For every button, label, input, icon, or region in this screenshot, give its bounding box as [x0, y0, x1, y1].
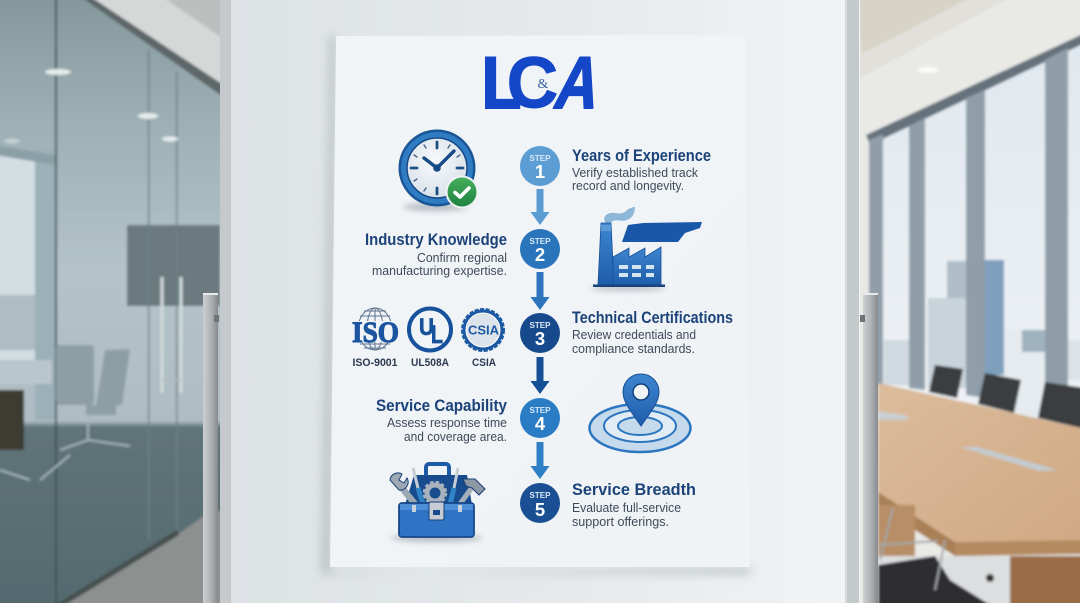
logo: LC&A: C	[507, 43, 558, 124]
step 5 badge: STEP	[530, 490, 551, 500]
arrow: step 3 to 4	[530, 357, 550, 394]
text: Industry Knowledge: manufacturing expertise.	[372, 264, 507, 278]
text: Technical Certifications: Technical Certifications	[572, 309, 733, 327]
step 1 badge	[520, 146, 560, 186]
step 2 badge: STEP	[530, 236, 551, 246]
arrow: step 4 to 5	[530, 442, 550, 479]
text: Industry Knowledge	[365, 231, 507, 278]
step 4 badge: STEP	[530, 405, 551, 415]
logo: LC&A: &	[538, 77, 549, 92]
text: Service Breadth: support offerings.	[572, 515, 669, 529]
icon: CSIA seal: CSIA	[468, 324, 499, 338]
icon: right door pull bar	[860, 293, 878, 603]
step 2 badge: 2	[535, 244, 545, 265]
text: Service Capability: and coverage area.	[404, 430, 507, 444]
panel: glass office door at left	[0, 0, 222, 603]
icon: left door pull bar	[203, 293, 219, 603]
text: Technical Certifications: compliance standards.	[572, 342, 695, 356]
icon: UL mark	[409, 308, 451, 350]
arrow: step 1 to 2	[530, 189, 550, 225]
icon: UL mark: L	[431, 321, 443, 349]
icon: toolbox with tools	[390, 464, 485, 542]
panel: office wall	[220, 0, 860, 603]
text: Years of Experience	[572, 147, 711, 193]
panel: poster	[330, 35, 750, 567]
text: Industry Knowledge: Industry Knowledge	[365, 231, 507, 249]
text: Years of Experience: Years of Experience	[572, 147, 711, 165]
step 1 badge: 1	[535, 161, 545, 182]
logo: LC&A: A	[548, 43, 609, 124]
icon: clock with check badge	[398, 130, 478, 211]
step 3 badge: 3	[535, 328, 545, 349]
caption: CSIA: CSIA	[472, 357, 496, 369]
panel: conference room at right	[858, 0, 1080, 603]
caption: ISO-9001: ISO-9001	[352, 357, 398, 369]
text: Years of Experience: Verify established track	[572, 166, 699, 180]
step 1 badge: STEP	[530, 153, 551, 163]
step 2 badge	[520, 229, 560, 269]
text: Service Capability: Assess response time	[387, 416, 507, 430]
icon: ISO globe: ISO	[352, 316, 399, 349]
text: Years of Experience: record and longevity.	[572, 179, 684, 193]
step 3 badge	[520, 313, 560, 353]
icon: UL mark: U	[419, 314, 434, 341]
text: Service Breadth: Service Breadth	[572, 481, 696, 499]
text: Technical Certifications: Review credentials and	[572, 328, 696, 342]
step 4 badge: 4	[535, 413, 546, 434]
text: Service Capability	[376, 397, 508, 444]
step 3 badge: STEP	[530, 320, 551, 330]
icon: CSIA seal	[462, 310, 504, 350]
icon: certification logos	[352, 308, 504, 369]
text: Technical Certifications	[572, 309, 733, 356]
step 4 badge	[520, 398, 560, 438]
icon: factory with Tennessee map	[590, 207, 702, 291]
icon: location pin with rings	[590, 374, 690, 452]
step 5 badge	[520, 483, 560, 523]
caption: UL508A: UL508A	[411, 357, 449, 369]
arrow: step 2 to 3	[530, 272, 550, 310]
logo: LC&A: L	[482, 41, 521, 124]
logo: LC&A	[482, 41, 609, 124]
text: Service Capability: Service Capability	[376, 397, 508, 415]
text: Service Breadth: Evaluate full-service	[572, 501, 681, 515]
step 5 badge: 5	[535, 499, 545, 520]
poster shadow	[322, 36, 752, 574]
text: Industry Knowledge: Confirm regional	[417, 251, 507, 265]
text: Service Breadth	[572, 481, 696, 529]
